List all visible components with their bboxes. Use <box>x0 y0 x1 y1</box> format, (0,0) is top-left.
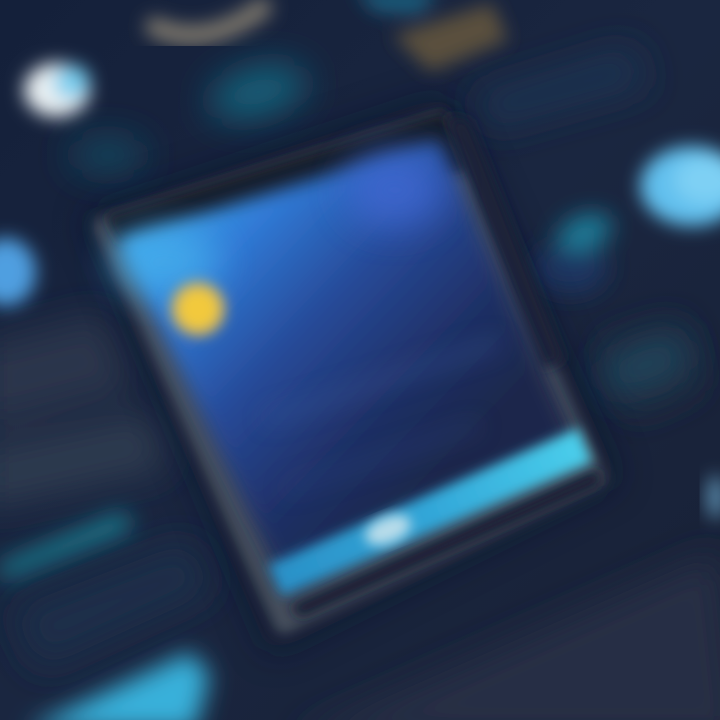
tablet right edge darkening <box>445 115 565 370</box>
tablet top bezel <box>104 110 470 245</box>
tablet frame <box>104 122 596 624</box>
bottom dark strip <box>290 468 602 618</box>
tablet shadow <box>85 95 620 655</box>
white slider knob <box>361 509 415 551</box>
tablet screen <box>118 140 575 590</box>
light glow on screen <box>110 230 220 294</box>
icon: teal strip lower right <box>600 335 690 395</box>
text lines on screen <box>265 342 500 490</box>
icon: top brown square <box>355 0 508 72</box>
icon: teal bar left <box>0 512 132 580</box>
tablet <box>85 95 620 655</box>
icon: yellow sun <box>169 280 227 338</box>
icon: blue blob upper right <box>640 146 720 226</box>
icon: pale blob far right <box>707 475 720 519</box>
blue glow on screen <box>345 152 445 228</box>
icon: cyan bar bottom left <box>25 652 210 720</box>
icon: white-blue blob upper left <box>24 63 90 117</box>
cyan progress bar <box>268 428 592 596</box>
icon: blue blob left edge <box>0 238 36 306</box>
icon: teal blob right <box>532 206 617 294</box>
icon: teal blobs top <box>70 55 313 173</box>
icon: top ring shape <box>155 8 262 35</box>
